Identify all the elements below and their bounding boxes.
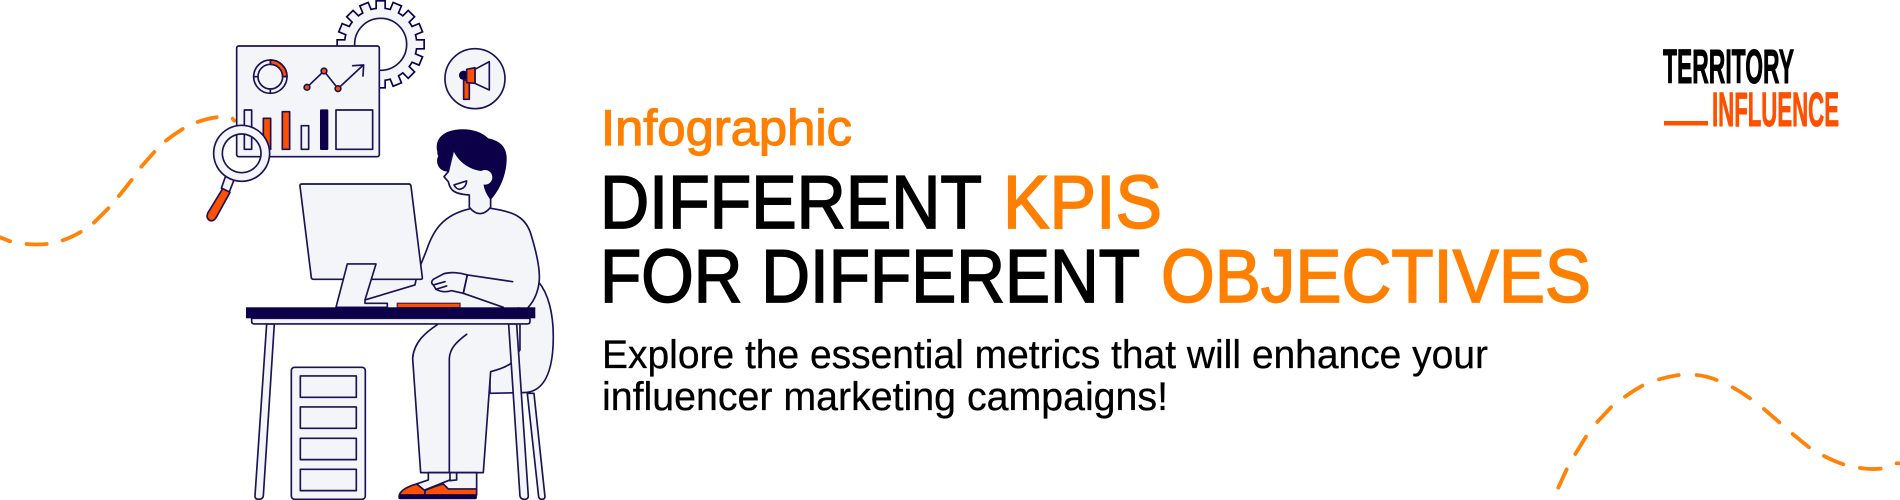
title: DIFFERENT: [600, 160, 982, 244]
person: trousers: [413, 317, 520, 473]
line chart with arrow: [304, 65, 364, 91]
filing cabinet: [291, 367, 365, 499]
title: FOR DIFFERENT: [600, 234, 1140, 318]
person: feet and shoes: [398, 473, 477, 499]
keyboard: [397, 303, 460, 308]
computer monitor and stand: [300, 184, 423, 307]
chair: [490, 282, 553, 499]
person: head and hair: [437, 129, 507, 214]
icon: magnifying glass: [207, 125, 270, 221]
panel: analytics dashboard: [237, 46, 379, 157]
dashed curve: left: [0, 117, 234, 244]
logo: Territory Influence: [1663, 41, 1839, 137]
person: shirt: [366, 208, 539, 307]
icon: megaphone in circle: [445, 49, 505, 109]
title: [600, 160, 1591, 318]
subtitle: influencer marketing campaigns!: [602, 375, 1168, 419]
dashed curve: right: [1558, 375, 1899, 488]
desk: [246, 307, 535, 499]
title: OBJECTIVES: [1161, 234, 1591, 318]
eyebrow heading: Infographic: [601, 100, 852, 156]
icon: gear: [336, 0, 425, 89]
scene lower half: [246, 129, 553, 499]
subtitle: Explore the essential metrics that will enhance your: [602, 333, 1488, 377]
bar chart: [244, 109, 373, 150]
illustration: person at desk with analytics: [207, 0, 553, 499]
title: KPIS: [1003, 160, 1162, 244]
person: arm and hand: [432, 273, 513, 307]
subtitle: [602, 333, 1488, 419]
donut chart: [254, 60, 287, 93]
